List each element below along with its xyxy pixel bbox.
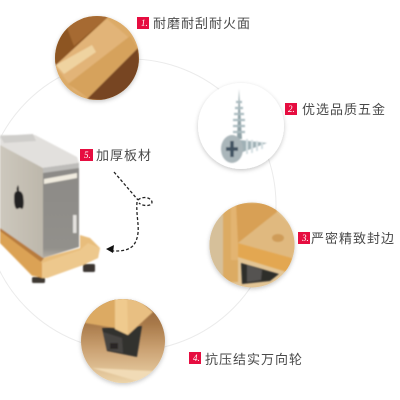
label 2: 优选品质五金 <box>302 102 386 117</box>
icon: arrow head <box>106 245 114 253</box>
light wood band <box>55 19 140 98</box>
label 2: 2. <box>288 104 295 114</box>
label 1: 耐磨耐刮耐火面 <box>153 16 251 31</box>
icon: front caster <box>32 277 45 283</box>
dashed arrow <box>106 172 152 253</box>
label 3: 严密精致封边 <box>311 231 395 246</box>
icon: apple logo <box>14 185 24 209</box>
label 4: 4. <box>193 353 200 363</box>
dark lower wood <box>87 48 139 100</box>
large connecting circle <box>0 59 276 351</box>
dark upper wood <box>55 18 107 66</box>
wheel <box>241 263 279 284</box>
label 3: 3. <box>301 233 309 243</box>
icon: horizontal screw <box>240 139 267 154</box>
vertical post <box>223 200 238 282</box>
icon: rear caster <box>83 264 95 272</box>
wood edge <box>238 243 292 273</box>
wooden cart base <box>0 226 100 278</box>
label 5: 加厚板材 <box>96 148 152 163</box>
pale background wood <box>210 214 223 276</box>
icon: screw head <box>221 135 243 163</box>
wheel <box>102 326 142 357</box>
panel: sealed edge detail <box>205 200 300 290</box>
panel: caster wheel detail <box>79 298 167 386</box>
panel: worn-resistant surface detail <box>50 15 145 105</box>
top surface <box>239 212 294 258</box>
computer tower <box>0 134 79 258</box>
wooden corner <box>85 299 154 336</box>
label 5: 5. <box>84 150 91 160</box>
panel: computer on wooden cart <box>0 134 100 283</box>
label 4: 抗压结实万向轮 <box>205 352 303 367</box>
label 1: 1. <box>141 18 148 28</box>
panel: screws detail <box>198 83 284 169</box>
floor plank line <box>94 368 152 380</box>
icon: vertical screw <box>233 89 245 139</box>
